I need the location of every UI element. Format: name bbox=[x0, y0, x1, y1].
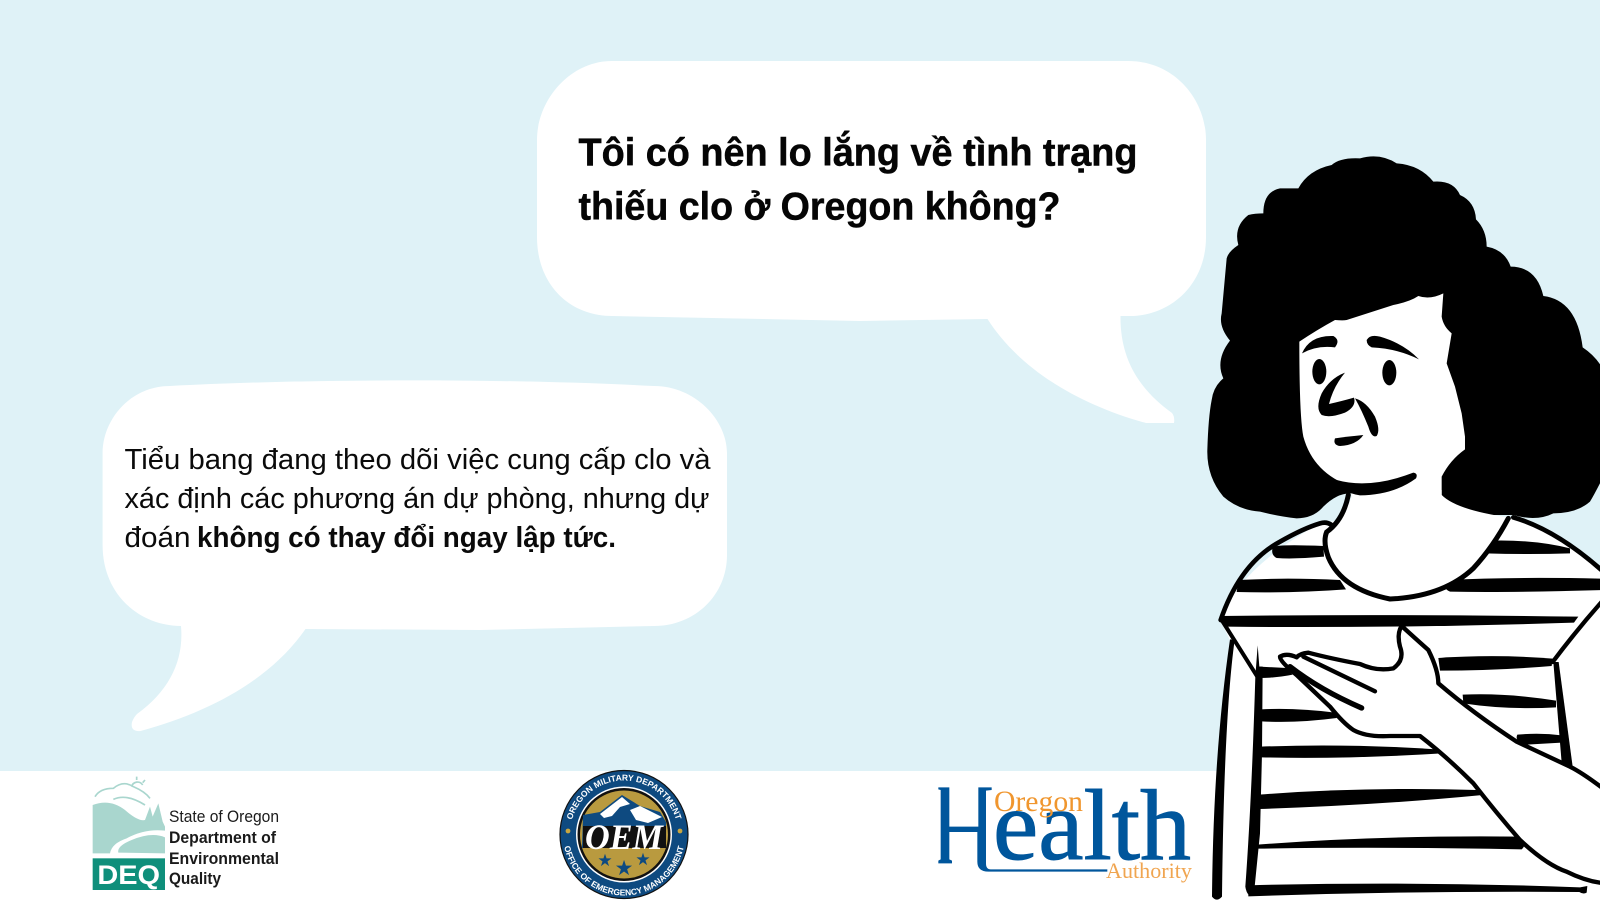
DEQ wordmark: Quality bbox=[169, 869, 221, 888]
DEQ wordmark: Environmental bbox=[169, 849, 279, 868]
logo: Oregon Health Authority bbox=[938, 769, 1192, 883]
seal mountain bbox=[582, 795, 666, 848]
question heading bbox=[578, 130, 1138, 228]
shirt and arm bbox=[1212, 517, 1600, 900]
ealth wordmark: ealth bbox=[993, 769, 1191, 881]
shoulder outlines bbox=[1221, 523, 1332, 620]
collar outline bbox=[1325, 495, 1508, 599]
right sleeve hem bbox=[1553, 600, 1600, 662]
bubble shape bbox=[537, 61, 1206, 423]
DEQ wordmark: State of Oregon bbox=[169, 807, 279, 826]
answer text: đoán bbox=[124, 522, 190, 554]
stripes bbox=[1220, 540, 1600, 849]
seal stars: ★ bbox=[615, 857, 633, 880]
DEQ badge bbox=[93, 858, 165, 890]
seal ring text: OREGON MILITARY DEPARTMENT bbox=[567, 774, 682, 819]
DEQ wordmark bbox=[169, 807, 279, 888]
nose bbox=[1318, 373, 1354, 416]
right eye bbox=[1382, 360, 1396, 385]
body right edge bbox=[1553, 662, 1573, 767]
Oregon wordmark: Oregon bbox=[994, 785, 1083, 818]
question heading: thiếu clo ở Oregon không? bbox=[578, 186, 1060, 228]
left eye bbox=[1312, 359, 1326, 384]
finger lines bbox=[1303, 657, 1375, 691]
left arm line bbox=[1212, 639, 1235, 900]
Authority wordmark: Authority bbox=[1106, 858, 1192, 883]
neck fill bbox=[1326, 490, 1508, 598]
DEQ wordmark: Department of bbox=[169, 828, 276, 847]
logo: Oregon DEQ: DEQ bbox=[97, 860, 160, 890]
answer text: xác định các phương án dự phòng, nhưng dự bbox=[124, 483, 710, 515]
seal ring text: OFFICE OF EMERGENCY MANAGEMENT bbox=[564, 845, 684, 896]
mouth bbox=[1334, 435, 1363, 446]
answer text bbox=[124, 444, 711, 554]
shirt hem bbox=[1248, 884, 1587, 896]
question heading: Tôi có nên lo lắng về tình trạng bbox=[578, 130, 1138, 174]
logo: Oregon DEQ bbox=[93, 777, 279, 890]
face bbox=[1299, 293, 1465, 497]
hand and forearm bbox=[1280, 626, 1600, 883]
logo: Oregon Office of Emergency Management seal: OEM bbox=[585, 817, 665, 857]
chin line bbox=[1337, 473, 1417, 495]
shirt body bbox=[1213, 517, 1600, 900]
speech bubble: answer bbox=[103, 380, 727, 731]
seal stars: ★ bbox=[597, 851, 613, 870]
seal ring text bbox=[564, 774, 684, 896]
right eyebrow bbox=[1367, 336, 1419, 359]
hair bbox=[1207, 156, 1600, 518]
answer text: Tiểu bang đang theo dõi việc cung cấp clo và bbox=[124, 444, 711, 476]
seal stars bbox=[597, 850, 651, 880]
face skin bbox=[1299, 293, 1465, 497]
bubble shape bbox=[103, 380, 727, 731]
speech bubble: question bbox=[537, 61, 1206, 423]
nose crease bbox=[1355, 398, 1378, 436]
illustration: worried woman in striped shirt bbox=[1207, 156, 1600, 900]
seal OEM band bbox=[583, 826, 666, 848]
DEQ landscape emblem bbox=[93, 777, 165, 853]
H letterform bbox=[938, 787, 1107, 872]
neck and collar bbox=[1325, 490, 1508, 599]
left sleeve hem bbox=[1222, 620, 1257, 677]
body left edge bbox=[1245, 645, 1263, 896]
left eyebrow bbox=[1302, 336, 1337, 353]
seal stars: ★ bbox=[635, 850, 651, 869]
logo: Oregon Office of Emergency Management seal bbox=[559, 770, 689, 900]
answer text: không có thay đổi ngay lập tức. bbox=[197, 522, 616, 554]
